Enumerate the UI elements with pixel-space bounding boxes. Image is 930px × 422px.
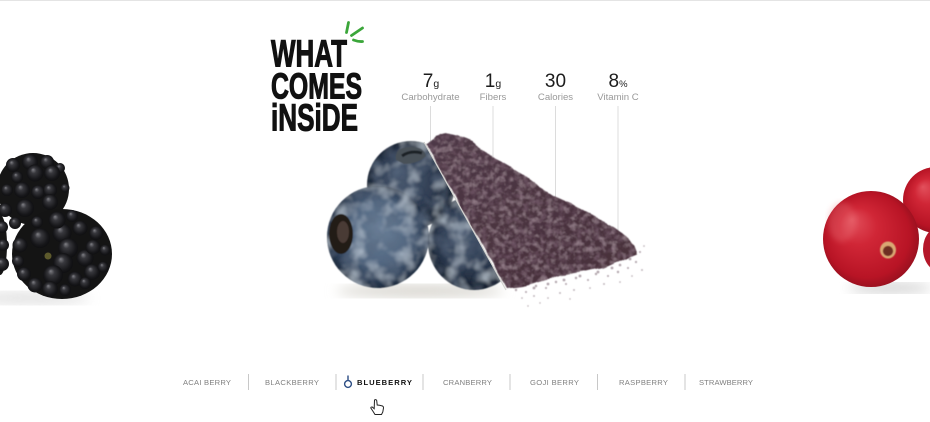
logo: what comes inside: COMES [271, 66, 362, 106]
stat: vitamin c [597, 71, 639, 103]
stat: calories: Calories [538, 92, 573, 103]
nutrition stats [401, 71, 639, 103]
stat: fibers: Fibers [480, 92, 507, 103]
nav labels: STRAWBERRY [699, 378, 753, 387]
icon: hand cursor [371, 400, 384, 414]
stat: fibers: 1g [485, 71, 501, 92]
cranberries [823, 167, 930, 293]
nav separators [248, 374, 685, 390]
blackberries [0, 153, 112, 304]
stat: vitamin c: 8% [608, 71, 628, 92]
stat: vitamin c: Vitamin C [597, 92, 639, 103]
blueberries and powder [327, 133, 645, 307]
berry navigation [183, 374, 753, 414]
icon: blueberry marker [345, 376, 351, 387]
stat: calories [538, 71, 573, 103]
cut line [424, 142, 506, 290]
nav labels: RASPBERRY [619, 378, 668, 387]
stat: carbohydrate: 7g [423, 71, 439, 92]
stat: carbohydrate [401, 71, 460, 103]
stat: calories: 30 [545, 71, 566, 92]
logo: what comes inside [271, 22, 362, 140]
stat: carbohydrate: Carbohydrate [401, 92, 460, 103]
nav labels: CRANBERRY [443, 378, 492, 387]
nav labels: ACAI BERRY [183, 378, 231, 387]
nav labels: BLACKBERRY [265, 378, 319, 387]
nav labels: BLUEBERRY [357, 378, 412, 387]
icon: green sprout strokes [346, 22, 362, 42]
powder pile [426, 133, 637, 288]
blueberries [327, 141, 520, 290]
logo: what comes inside: WHAT [271, 34, 347, 76]
stat: fibers [480, 71, 507, 103]
loose powder specks [515, 245, 645, 307]
leader lines [430, 106, 618, 232]
nav labels [183, 378, 753, 387]
nav labels: GOJI BERRY [530, 378, 579, 387]
logo: what comes inside: iNSiDE [271, 98, 358, 140]
